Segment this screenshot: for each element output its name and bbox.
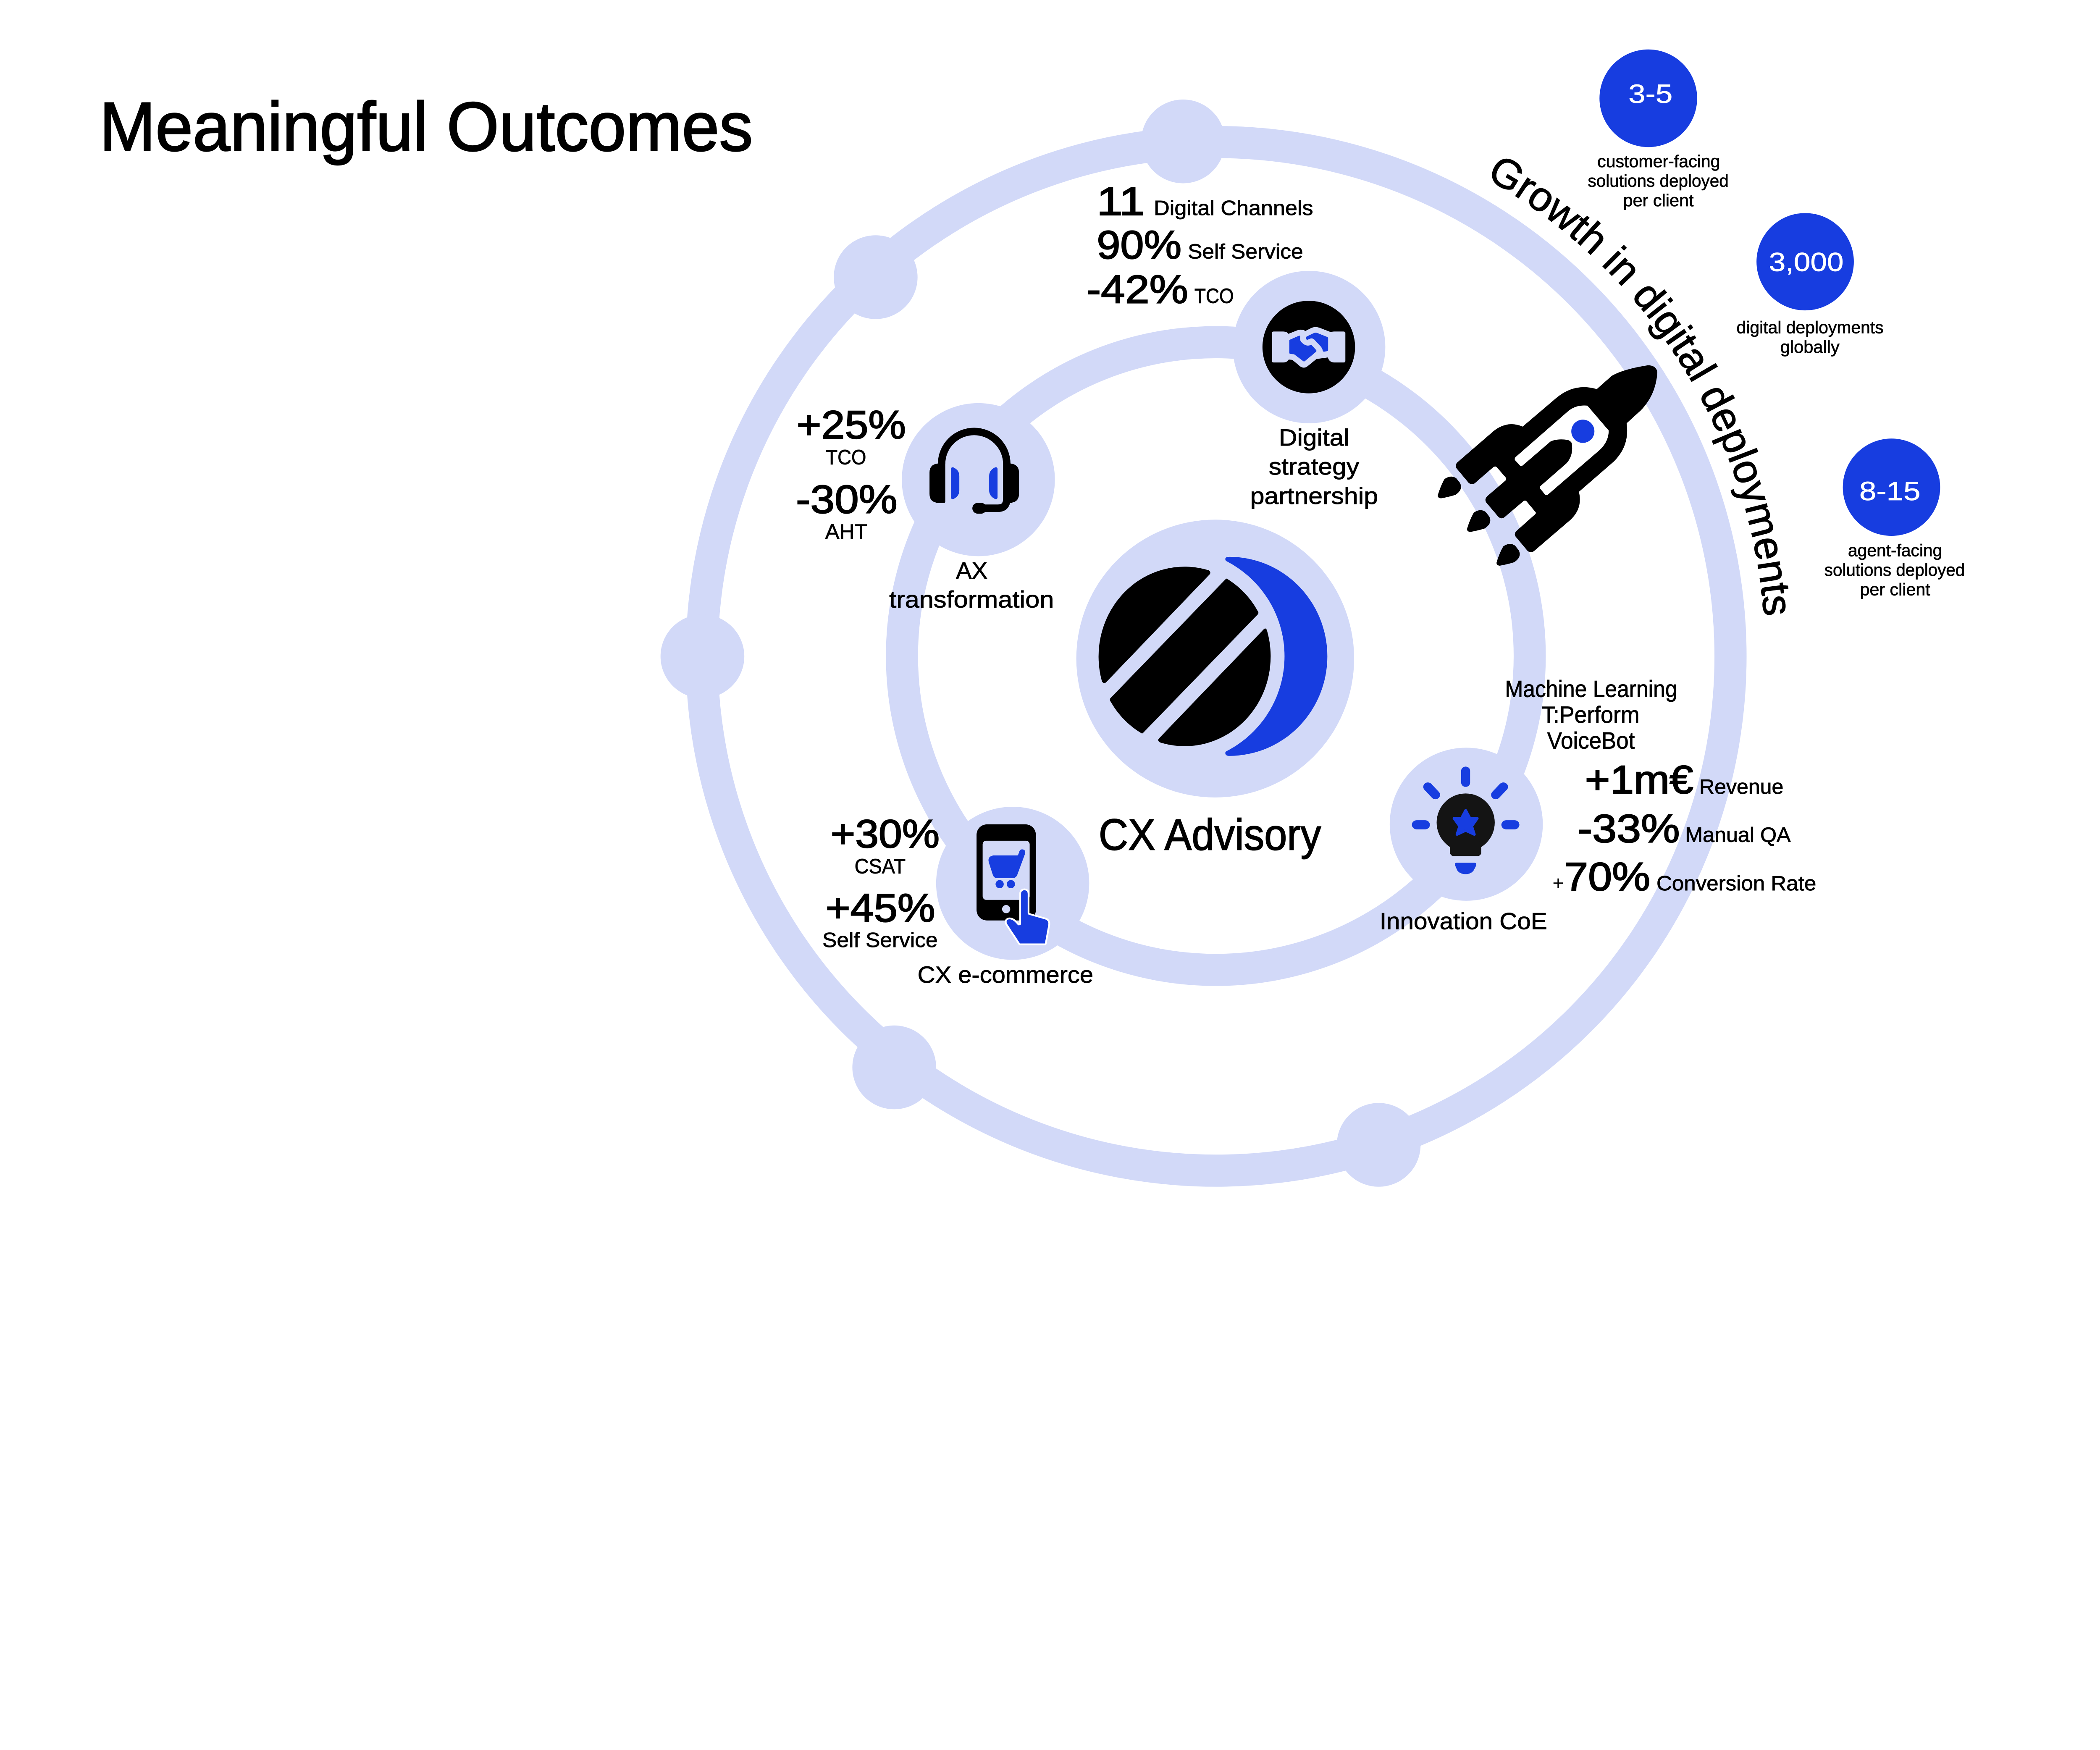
panel: CX e-commerce node [936,807,1089,960]
stats: digital strategy [1087,179,1313,312]
curved heading: growth in digital deployments: Growth in digital deployments [1481,146,1801,618]
label: digital strategy partnership: Digital [1279,425,1349,451]
stats: innovation: +1m€ [1585,758,1693,802]
inner orbit ring [902,342,1530,970]
label: CX e-commerce: CX e-commerce [918,962,1093,988]
caption: agent-facing: per client [1860,580,1930,599]
label: AX transformation: AX [956,558,987,584]
stats: CX e-commerce [822,812,940,952]
stats: AX transformation [796,403,906,543]
label: AX transformation [889,558,1054,613]
icon: headset [929,431,1019,514]
panel: Innovation CoE node [1390,748,1543,901]
stat badge: 3-5 [1599,50,1697,147]
stat badge: 8-15: 8-15 [1859,477,1921,506]
panel: CX Advisory central logo [1076,519,1354,798]
stats: innovation: 70% [1564,855,1650,899]
stats: CX e-commerce: CSAT [855,855,906,878]
caption: digital deployments: globally [1780,337,1840,357]
caption: customer-facing: per client [1623,191,1694,210]
stats: CX e-commerce: +45% [826,886,935,930]
caption: agent-facing [1824,540,1965,599]
icon: light bulb with star [1412,766,1520,874]
stat badge: 3,000 [1756,213,1854,310]
stats: digital strategy: 90% [1097,223,1181,268]
label: digital strategy partnership: partnership [1250,483,1378,509]
stats: innovation: + [1553,872,1564,894]
stats: digital strategy: Self Service [1188,240,1303,263]
caption: digital deployments [1737,317,1884,357]
central label: CX Advisory [1099,810,1321,859]
stats: innovation: -33% [1578,806,1680,851]
stats: innovation [1553,758,1816,899]
stats: digital strategy: 11 [1097,179,1145,224]
label: Innovation CoE: Innovation CoE [1380,908,1547,934]
stats: AX transformation: TCO [826,446,866,469]
panel: AX transformation node [902,403,1055,556]
label: machine learning list: VoiceBot [1547,728,1635,754]
caption: agent-facing: agent-facing [1848,540,1942,560]
caption: customer-facing: customer-facing [1597,152,1720,171]
panel: digital strategy node [1233,271,1385,423]
stats: AX transformation: +25% [797,403,906,447]
label: digital strategy partnership [1250,425,1378,509]
label: machine learning list [1505,676,1677,754]
stats: AX transformation: AHT [825,520,867,543]
stats: digital strategy: Digital Channels [1154,197,1313,220]
outer orbit ring with nodes [661,100,1730,1187]
stats: innovation: Conversion Rate [1656,872,1816,895]
stats: AX transformation: -30% [796,478,898,522]
icon: handshake [1272,327,1345,368]
stats: CX e-commerce: Self Service [822,929,938,952]
stat badge: 3,000: 3,000 [1769,248,1844,277]
stats: CX e-commerce: +30% [831,812,940,856]
icon: rocket [1438,365,1657,566]
stats: innovation: Manual QA [1685,824,1791,847]
caption: customer-facing: solutions deployed [1588,171,1729,191]
caption: digital deployments: digital deployments [1737,317,1884,337]
label: AX transformation: transformation [889,587,1054,613]
caption: customer-facing [1588,152,1729,210]
caption: agent-facing: solutions deployed [1824,560,1965,580]
icon: phone with cart and hand [976,824,1048,944]
stats: digital strategy: -42% [1087,267,1188,312]
label: digital strategy partnership: strategy [1269,454,1359,480]
stats: innovation: Revenue [1699,775,1783,798]
label: machine learning list: Machine Learning [1505,676,1677,702]
stat badge: 3-5: 3-5 [1628,79,1672,109]
stat badge: 8-15 [1843,438,1940,536]
label: machine learning list: T:Perform [1542,702,1640,728]
stats: digital strategy: TCO [1194,284,1234,307]
title: Meaningful Outcomes [100,88,753,165]
